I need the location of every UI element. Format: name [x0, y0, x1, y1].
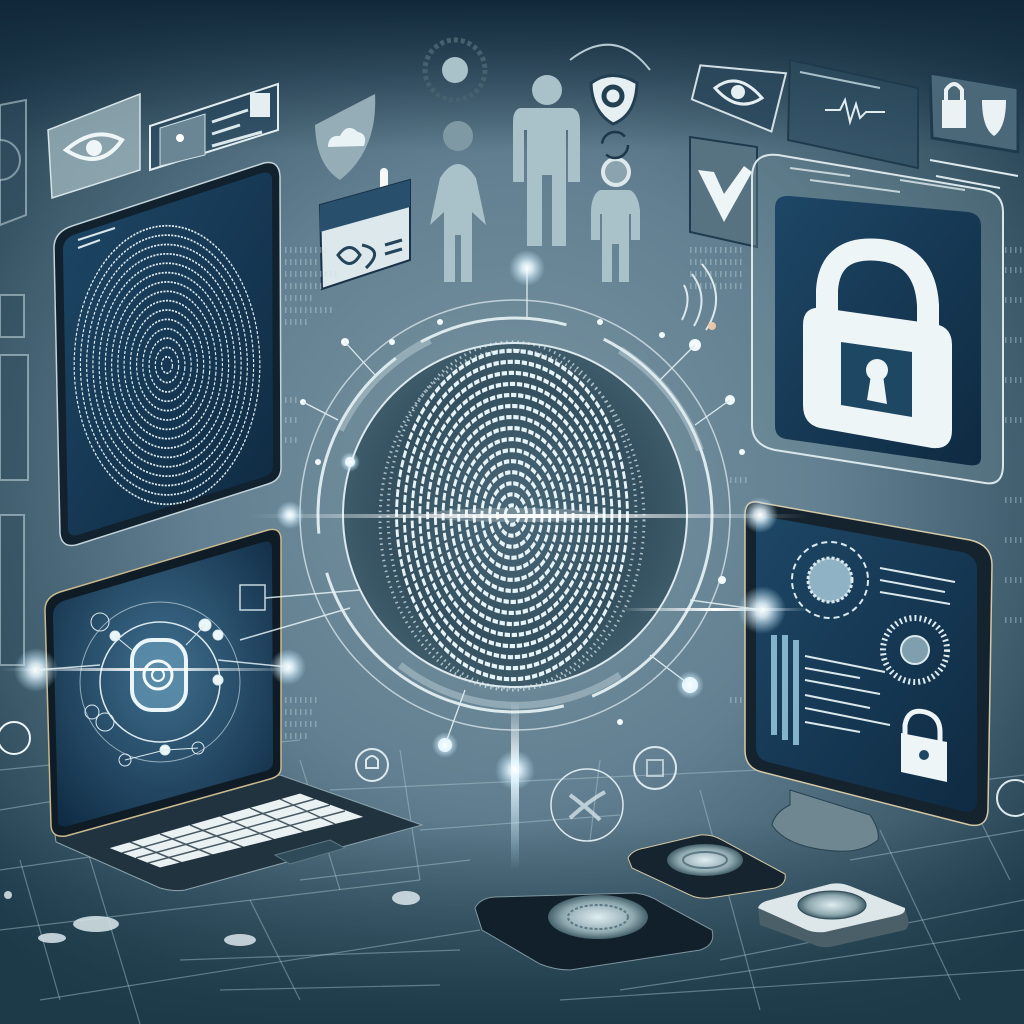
panel: id card — [320, 168, 410, 289]
monitor stand — [772, 790, 878, 851]
blue bars — [771, 635, 799, 745]
icon: top scan circle — [425, 40, 485, 100]
monitor padlock — [901, 711, 947, 782]
icon: man figure — [513, 75, 580, 246]
glowing nodes — [14, 250, 786, 790]
fingerprint: central — [397, 351, 627, 679]
panel: right monitor — [745, 502, 992, 851]
scan dial — [792, 542, 868, 618]
light beams — [0, 508, 810, 870]
icon: woman figure — [430, 121, 486, 282]
left edge panels — [0, 100, 28, 665]
sun dial — [883, 618, 947, 682]
panel: lock cards — [930, 73, 1018, 188]
text bars — [805, 568, 955, 732]
keyboard — [108, 793, 365, 868]
icon: child figure — [591, 159, 640, 282]
node spokes — [303, 270, 730, 745]
fingerprint: tablet — [65, 212, 269, 518]
bottom-left chips — [4, 891, 420, 946]
small floating round icons — [0, 722, 1024, 841]
connector lines — [36, 585, 762, 670]
ring nodes — [300, 319, 745, 752]
panel: check mark — [690, 137, 757, 247]
laptop fingerprint diagram — [80, 602, 240, 766]
scanner rings — [300, 300, 730, 730]
device: center fingerprint pad — [475, 893, 713, 970]
icon: wifi signal — [682, 264, 716, 330]
icon: shield — [570, 45, 650, 158]
laptop screen — [45, 529, 281, 836]
device: upper fingerprint pad — [628, 835, 785, 898]
dotted data fields — [285, 250, 1024, 736]
scanner disc — [343, 343, 687, 687]
icon: cloud badge — [315, 94, 375, 180]
device: light fingerprint pad — [758, 883, 908, 947]
laptop base — [55, 775, 422, 891]
panel: laptop — [45, 529, 422, 891]
panel: right lock card — [752, 155, 1003, 483]
panel: scan card — [150, 84, 278, 170]
panel: eye monitor — [689, 53, 786, 132]
central fingerprint scanner — [300, 270, 745, 752]
circuit grid floor — [0, 740, 1024, 1024]
panel: eye card — [48, 94, 140, 198]
icon: padlock — [803, 250, 952, 448]
fingerprint speckled edge — [380, 342, 644, 690]
panel: waveform monitor — [788, 60, 918, 168]
icon: eye — [66, 134, 122, 159]
panel: left fingerprint tablet — [54, 163, 281, 546]
